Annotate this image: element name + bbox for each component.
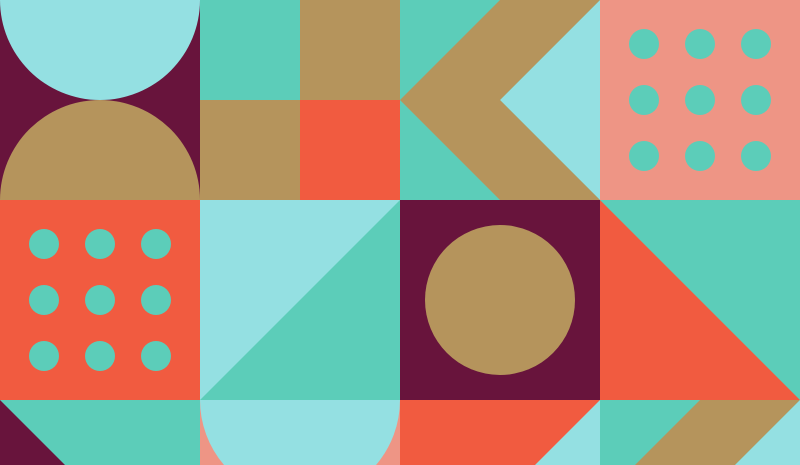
tile: four-colour checker squares — [200, 0, 400, 200]
tile: light semicircle on pink — [200, 400, 400, 465]
tile: teal dots on orange — [0, 200, 200, 400]
tile: teal dots on pink — [600, 0, 800, 200]
tile: two semicircles on dark — [0, 0, 200, 200]
tile: light triangle on orange — [400, 400, 600, 465]
tile: tan chevron — [400, 0, 600, 200]
tile: orange triangle on teal — [600, 200, 800, 400]
tile: diagonal light and teal triangles — [200, 200, 400, 400]
tile: tan diagonal band — [600, 400, 800, 465]
tile: tan circle on dark — [400, 200, 600, 400]
tile: dark corner triangle on teal — [0, 400, 200, 465]
